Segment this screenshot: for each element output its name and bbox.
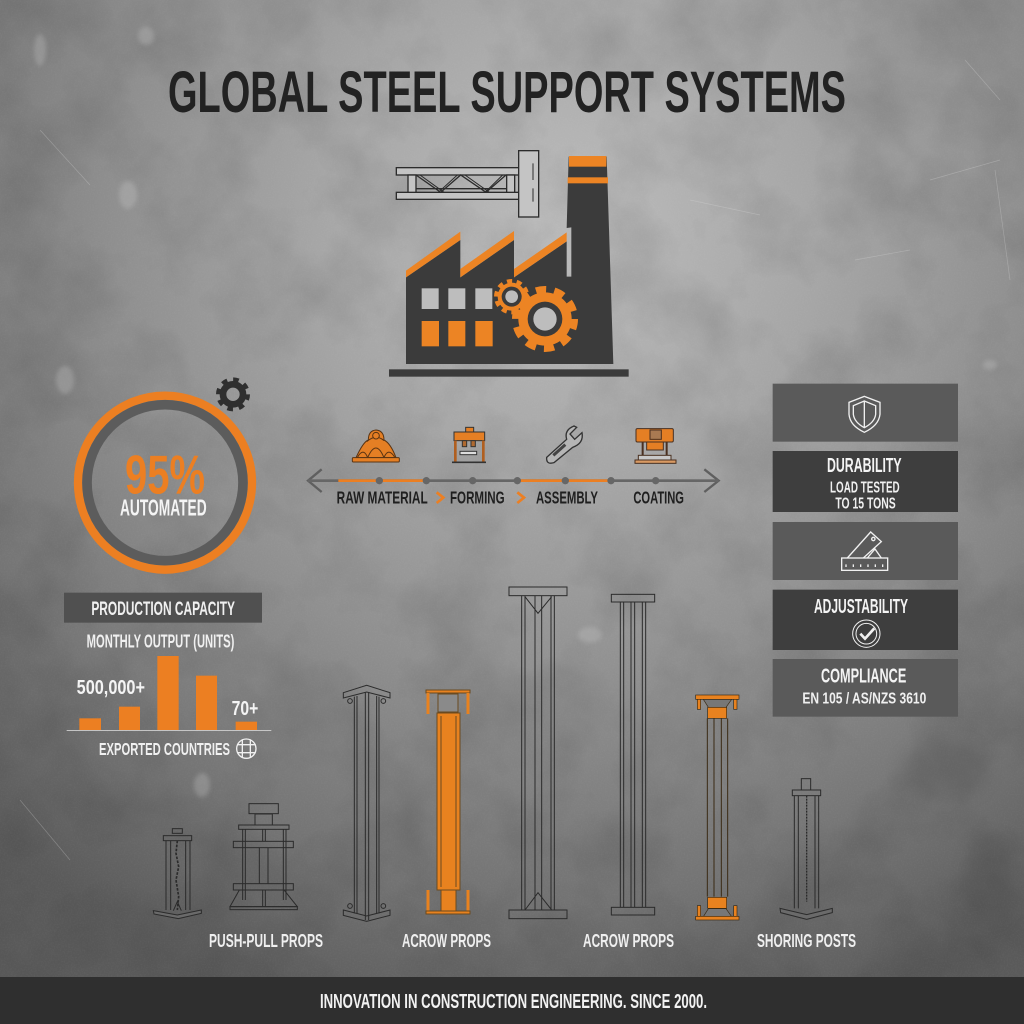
prop: tall braced column <box>509 587 567 919</box>
icon: globe <box>237 739 256 758</box>
durability tile: LOAD TESTED <box>830 480 900 497</box>
compliance tile <box>773 659 958 717</box>
exported countries label: EXPORTED COUNTRIES <box>99 739 230 759</box>
panel: automation gauge <box>78 380 252 570</box>
process timeline <box>308 426 719 507</box>
icon: forming press <box>452 427 486 462</box>
footer band: INNOVATION IN CONSTRUCTION ENGINEERING. SINCE 2000. <box>320 991 707 1013</box>
prop labels: PUSH-PULL PROPS <box>209 931 323 951</box>
step labels <box>337 487 684 507</box>
icon: small gear <box>497 282 527 312</box>
compliance tile: COMPLIANCE <box>821 665 906 688</box>
hero illustration: factory with truss <box>389 151 629 377</box>
heading: PRODUCTION CAPACITY <box>91 599 235 620</box>
props row <box>153 587 832 921</box>
step labels: RAW MATERIAL <box>337 487 428 507</box>
compliance tile: EN 105 / AS/NZS 3610 <box>802 691 926 708</box>
durability tile: DURABILITY <box>827 455 902 477</box>
icon: wrench <box>547 426 582 463</box>
adjustability tile <box>773 590 958 650</box>
prop labels <box>209 931 856 951</box>
automated label: AUTOMATED <box>120 495 207 521</box>
icon: gear <box>219 380 247 408</box>
prop: tall gray column <box>343 685 390 921</box>
icon: large gear <box>516 290 574 348</box>
gauge ring <box>78 396 252 570</box>
prop: slim column <box>611 594 655 915</box>
icon: raw material pile <box>352 430 399 462</box>
icon: coating machine <box>635 429 676 463</box>
percentage: 95% <box>125 443 205 505</box>
value: monthly output: 500,000+ <box>77 676 145 699</box>
step labels: ASSEMBLY <box>536 487 598 507</box>
adjustability icon tile <box>773 522 958 580</box>
prop: shoring post <box>780 779 832 919</box>
prop labels: ACROW PROPS <box>583 931 674 951</box>
bar chart <box>67 656 271 731</box>
durability tile: TO 15 TONS <box>835 496 896 513</box>
prop: orange acrow <box>426 690 470 914</box>
durability icon tile <box>773 384 958 442</box>
prop labels: SHORING POSTS <box>757 931 856 951</box>
prop: heavy push-pull <box>230 804 297 910</box>
step labels: COATING <box>633 487 684 507</box>
icon: steel truss <box>396 151 539 217</box>
durability tile <box>773 451 958 513</box>
prop labels: ACROW PROPS <box>402 931 491 951</box>
timeline arrow <box>308 469 719 492</box>
footer band <box>0 977 1024 1024</box>
step labels: FORMING <box>450 487 505 507</box>
prop: small push-pull <box>153 829 201 919</box>
prop: orange-capped column <box>696 695 739 920</box>
heading <box>64 593 262 623</box>
chevrons <box>437 492 524 503</box>
chart title: MONTHLY OUTPUT (UNITS) <box>87 630 234 651</box>
value: countries: 70+ <box>232 697 258 720</box>
panel: production capacity <box>64 593 271 759</box>
panel: features <box>773 384 958 717</box>
adjustability tile: ADJUSTABILITY <box>814 596 908 618</box>
icon: factory building <box>389 156 629 377</box>
